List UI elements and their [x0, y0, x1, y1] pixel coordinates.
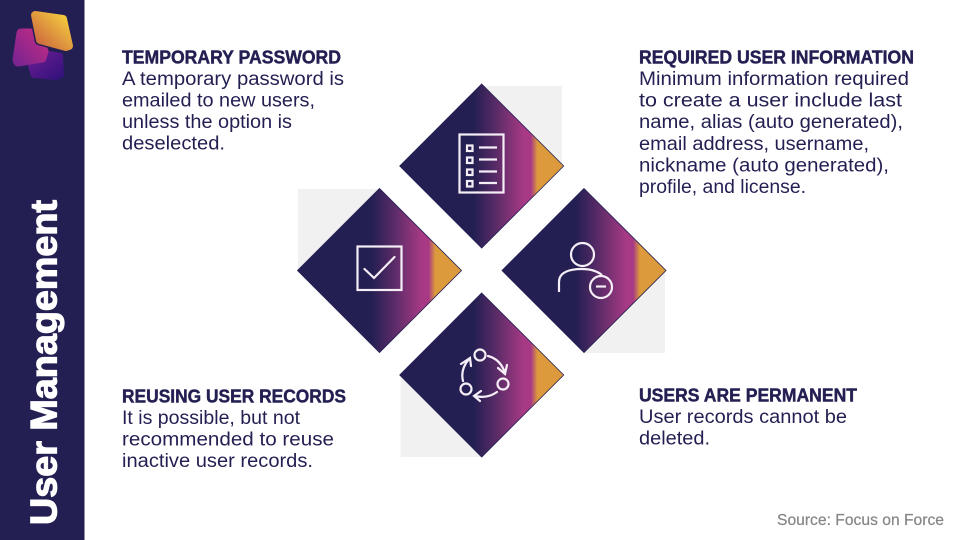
body text: inactive user records.	[122, 451, 313, 472]
body text: It is possible, but not	[122, 408, 301, 429]
panel: required user information	[639, 48, 914, 198]
body text: deleted.	[639, 428, 710, 450]
body text: email address, username,	[639, 134, 869, 155]
sidebar title: User Management	[24, 200, 64, 525]
diamond: right with user minus icon	[502, 188, 666, 352]
background square: left	[298, 189, 380, 271]
diamond: bottom with cycle icon	[400, 293, 564, 457]
panel: temporary password	[122, 48, 344, 154]
body text: User records cannot be	[639, 407, 847, 428]
body text	[122, 69, 344, 154]
body text: A temporary password is	[122, 69, 344, 90]
sidebar	[0, 0, 84, 540]
background square: bottom	[400, 375, 482, 457]
logo	[17, 15, 69, 77]
body text: recommended to reuse	[122, 430, 334, 451]
body text: unless the option is	[122, 112, 292, 133]
body text: name, alias (auto generated),	[639, 112, 903, 133]
heading: REQUIRED USER INFORMATION	[639, 48, 914, 68]
heading: TEMPORARY PASSWORD	[122, 48, 341, 68]
body text: nickname (auto generated),	[639, 155, 889, 176]
background square: right	[584, 271, 665, 353]
panel: reusing user records	[122, 386, 346, 472]
icon: checkbox	[358, 246, 402, 290]
body text: deselected.	[122, 134, 225, 154]
body text: Minimum information required	[639, 69, 909, 90]
source note: Source: Focus on Force	[777, 512, 944, 529]
background square: top	[481, 86, 562, 166]
heading: REUSING USER RECORDS	[122, 386, 346, 406]
heading: USERS ARE PERMANENT	[639, 386, 857, 406]
icon: cycle arrows	[460, 350, 508, 401]
body text: emailed to new users,	[122, 90, 315, 112]
body text	[122, 408, 334, 472]
icon: checklist	[460, 134, 504, 192]
diamond: top with checklist icon	[400, 84, 564, 248]
body text: profile, and license.	[639, 177, 806, 198]
icon: user with minus	[559, 243, 612, 298]
body text	[639, 69, 909, 198]
panel: users are permanent	[639, 386, 857, 450]
diamond: left with checkbox icon	[298, 188, 462, 352]
body text: to create a user include last	[639, 91, 903, 112]
body text	[639, 407, 847, 450]
